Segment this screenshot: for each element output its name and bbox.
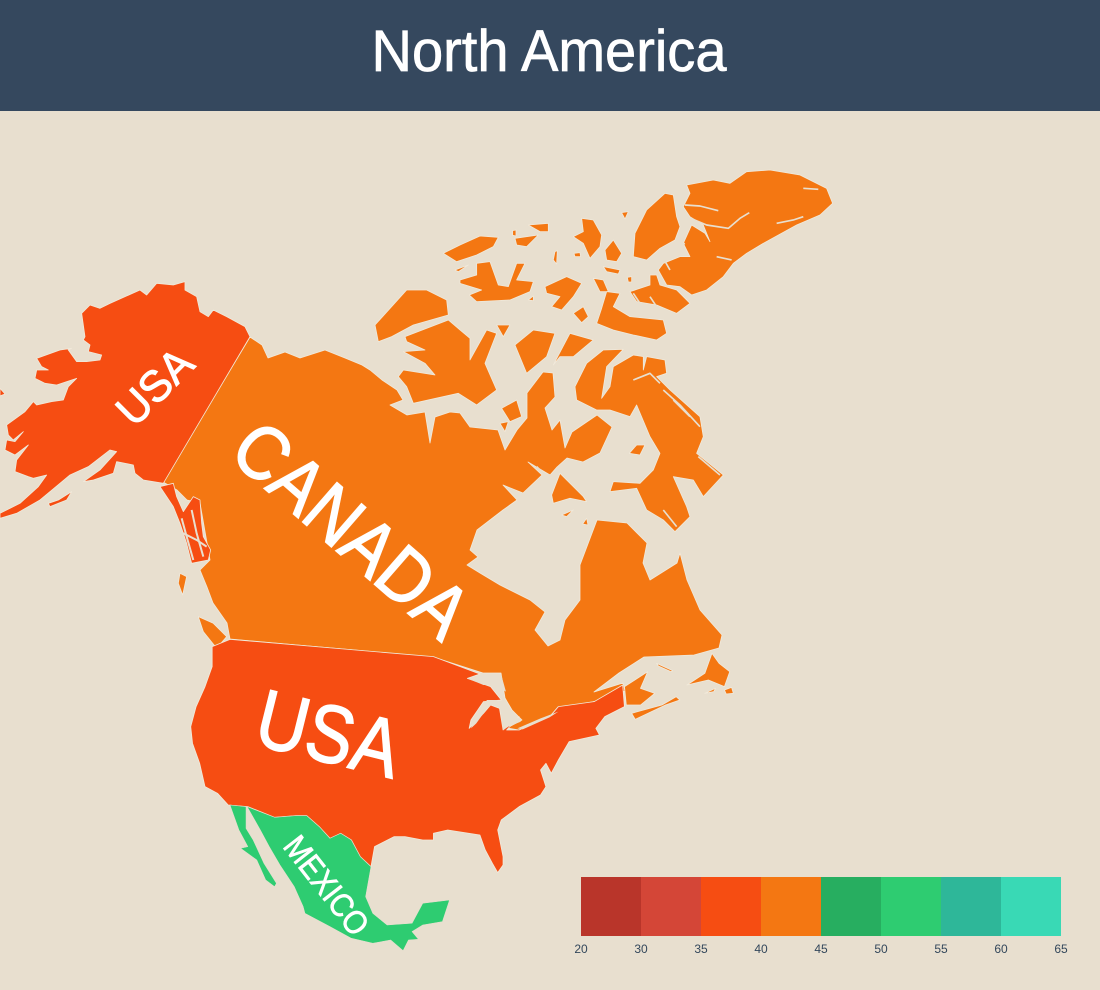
label: USA mainland: USA [247, 673, 410, 796]
legend labels [574, 942, 1068, 956]
west coast islands [178, 573, 227, 648]
label: Mexico: MEXICO [276, 828, 377, 942]
legend labels: 30 [634, 942, 648, 956]
title banner: North America [372, 19, 727, 84]
label: USA Alaska: USA [107, 338, 204, 435]
legend labels: 20 [574, 942, 588, 956]
fjords cut into Ellesmere and Baffin [537, 188, 818, 527]
east coast provinces and Newfoundland [624, 653, 733, 719]
legend labels: 45 [814, 942, 828, 956]
legend labels: 65 [1054, 942, 1068, 956]
country labels [107, 338, 487, 942]
contiguous USA [191, 639, 624, 873]
map: USA [0, 282, 624, 873]
Alaska [0, 282, 250, 563]
legend [574, 877, 1068, 956]
map: Canada [163, 170, 833, 730]
panhandle channels [182, 510, 207, 560]
mainland Mexico [247, 807, 450, 951]
Great Lakes [467, 673, 558, 730]
Canadian Arctic islands [375, 170, 833, 532]
label: Canada: CANADA [216, 405, 487, 656]
legend labels: 40 [754, 942, 768, 956]
legend labels: 50 [874, 942, 888, 956]
legend labels: 35 [694, 942, 708, 956]
title banner [0, 0, 1100, 111]
Alaska panhandle [160, 483, 211, 563]
legend labels: 60 [994, 942, 1008, 956]
map: Mexico [230, 805, 450, 951]
legend labels: 55 [934, 942, 948, 956]
Canada mainland [163, 337, 722, 730]
Baja California [230, 805, 276, 887]
legend color scale [581, 877, 1061, 936]
